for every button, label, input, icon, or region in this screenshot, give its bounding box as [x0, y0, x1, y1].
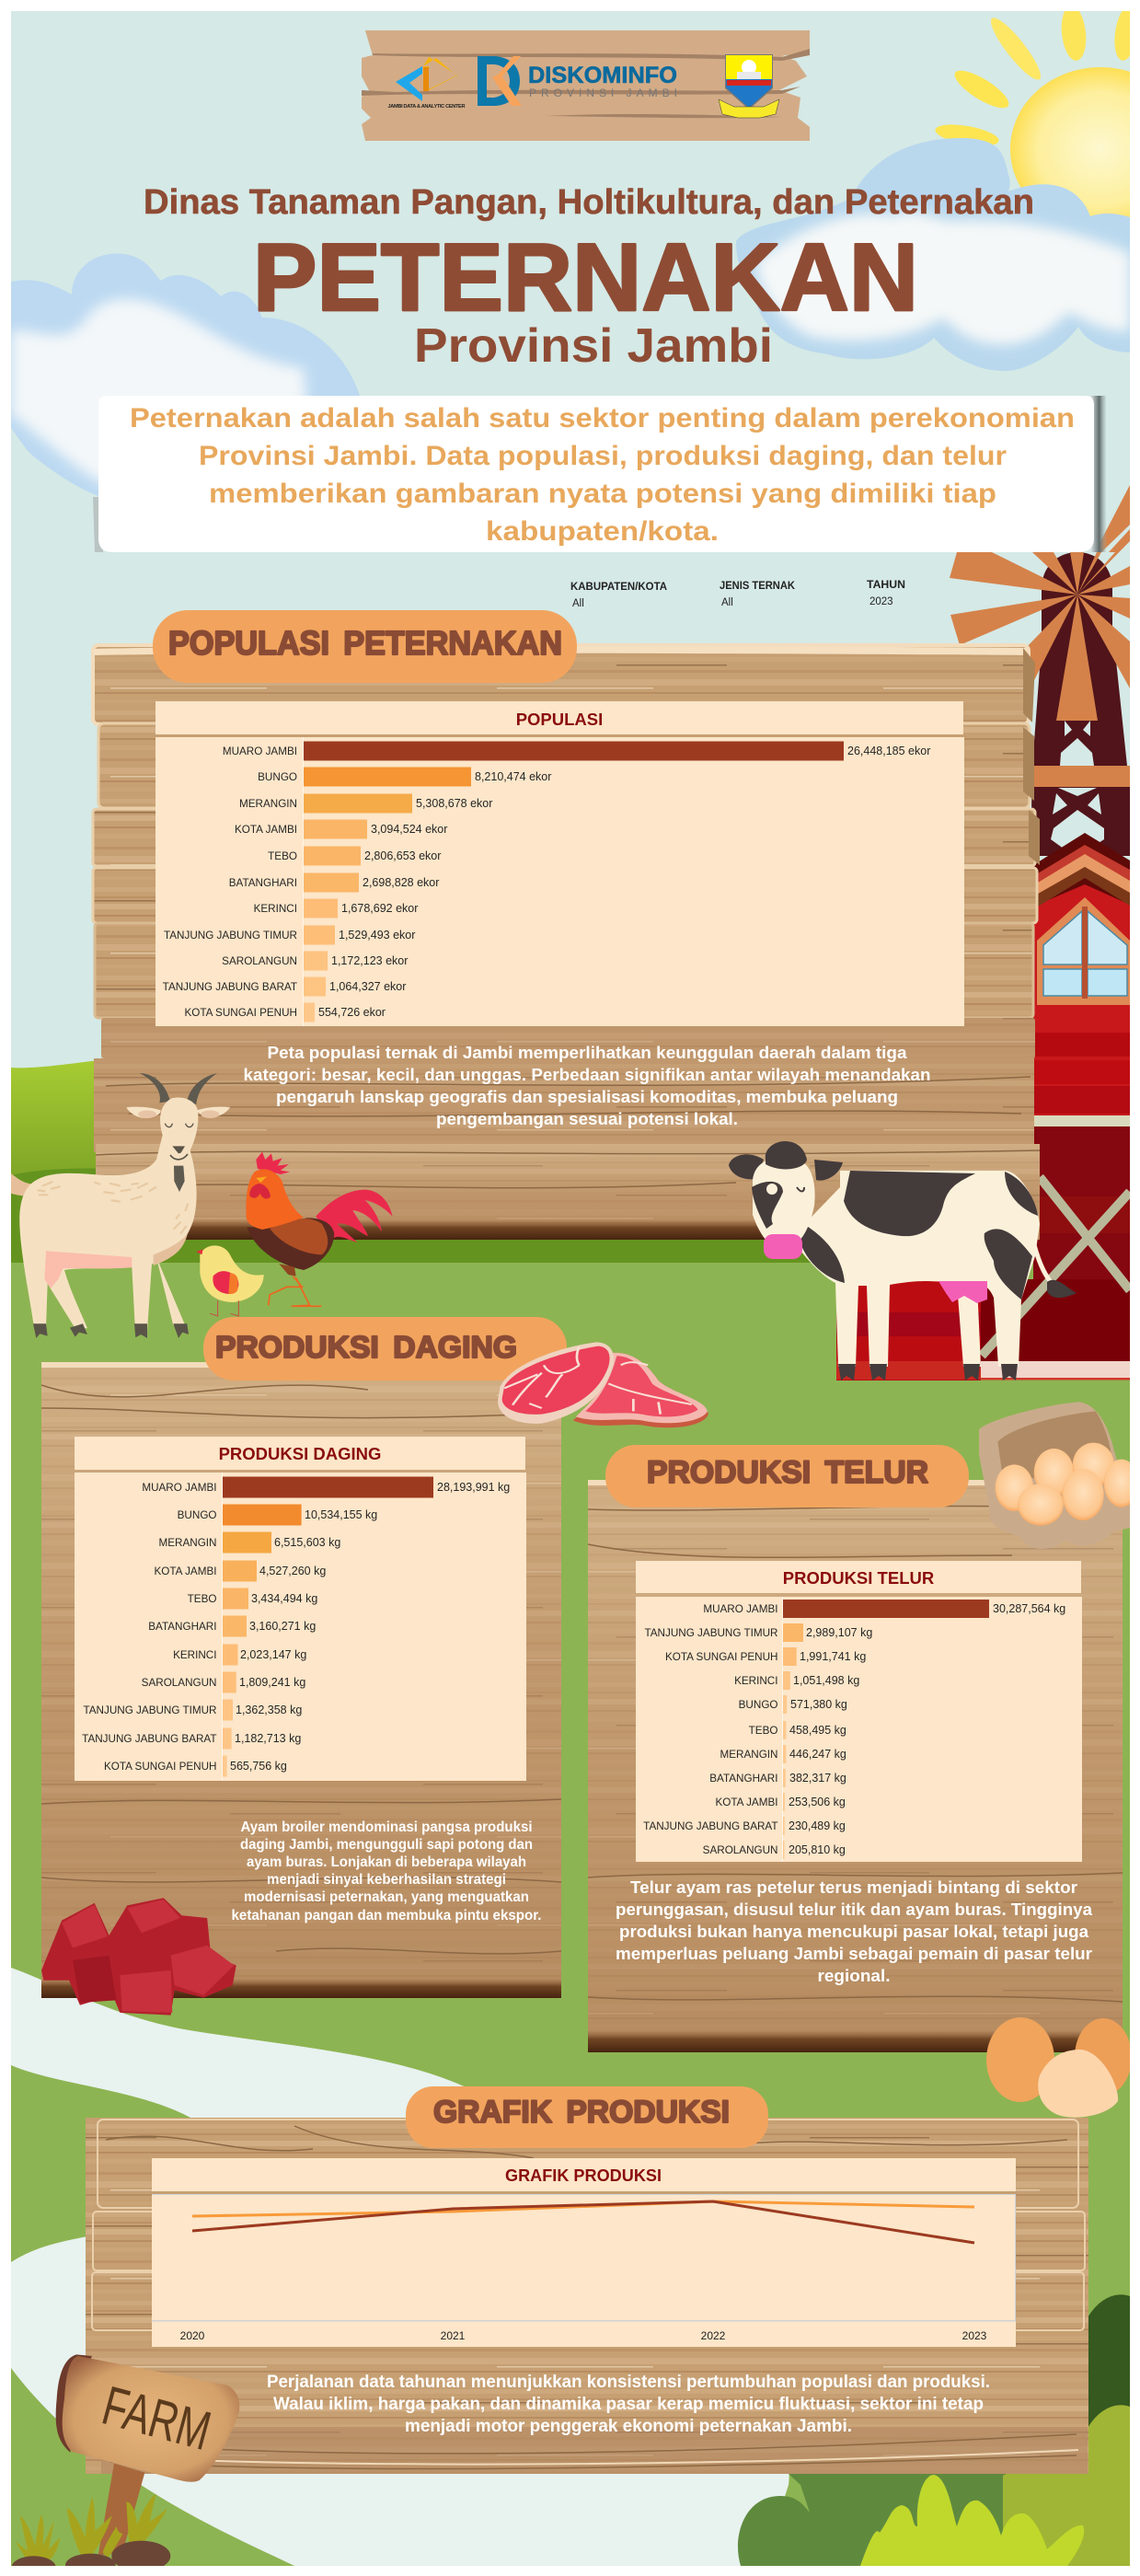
wooden sign board	[362, 30, 810, 141]
text block: populasi description: pengaruh lanskap geografis dan spesialisasi komoditas, membuka peluang	[276, 1087, 898, 1106]
text block: populasi description: Peta populasi ternak di Jambi memperlihatkan keunggulan daerah dalam tiga	[267, 1043, 907, 1062]
panel: populasi wood board	[93, 645, 1040, 1240]
green hills	[11, 1057, 1130, 2566]
chart: grafik produksi line chart	[152, 2158, 1016, 2347]
chart: produksi daging bar chart: 565,756 kg	[230, 1760, 287, 1773]
chart: produksi daging bar chart: 2,023,147 kg	[240, 1648, 306, 1661]
chart: produksi daging bar chart: BATANGHARI	[148, 1621, 217, 1633]
chart: produksi daging bar chart: SAROLANGUN	[142, 1677, 217, 1689]
windmill	[950, 485, 1130, 856]
filter: kabupaten/kota: All	[572, 598, 584, 609]
chart: produksi daging bar chart: 3,160,271 kg	[249, 1620, 316, 1633]
logo board	[362, 30, 810, 141]
chart: produksi daging bar chart: 1,182,713 kg	[235, 1732, 301, 1745]
chart: produksi daging bar chart: MUARO JAMBI	[142, 1482, 217, 1494]
chart: produksi telur bar chart: KOTA SUNGAI PENUH	[665, 1651, 778, 1663]
chart: produksi daging bar chart	[75, 1437, 526, 1781]
filter: jenis ternak: JENIS TERNAK	[720, 581, 796, 592]
text block: daging description: ketahanan pangan dan membuka pintu ekspor.	[232, 1908, 541, 1923]
logo: Jambi Data & Analytic Center	[388, 57, 466, 110]
pale road	[11, 1968, 789, 2566]
chart: produksi telur bar chart	[636, 1561, 1082, 1862]
windmill cross beam	[1031, 766, 1130, 787]
filter: tahun: TAHUN	[867, 580, 905, 591]
chart: populasi bar chart: POPULASI	[516, 710, 603, 729]
chart: produksi telur bar chart: 446,247 kg	[789, 1748, 846, 1761]
heading pill: grafik produksi	[406, 2086, 768, 2148]
barn door braces	[982, 1192, 1130, 1356]
chart: produksi telur bar chart: SAROLANGUN	[703, 1844, 778, 1856]
text block: daging description: menjadi sinyal keberhasilan strategi	[267, 1872, 506, 1888]
text block: daging description	[232, 1819, 541, 1923]
chart: populasi bar chart: KOTA SUNGAI PENUH	[184, 1007, 297, 1019]
chart: populasi bar chart: 26,448,185 ekor	[847, 745, 930, 757]
text block: daging description: ayam buras. Lonjakan di beberapa wilayah	[247, 1854, 526, 1870]
icon: cow	[729, 1141, 1077, 1380]
heading pill: populasi peternakan	[153, 610, 577, 683]
text block: grafik description: Walau iklim, harga pakan, dan dinamika pasar kerap memicu fluktuasi, sektor ini tetap	[273, 2394, 984, 2414]
icon: brown eggs	[986, 2017, 1132, 2118]
chart: produksi daging bar chart: 6,515,603 kg	[274, 1536, 340, 1549]
logo text: Diskominfo: DISKOMINFO	[528, 63, 677, 88]
chart: populasi bar chart: MUARO JAMBI	[223, 745, 297, 757]
text block: telur description: regional.	[817, 1966, 891, 1985]
chart: populasi bar chart: 3,094,524 ekor	[371, 823, 447, 836]
filter: jenis ternak	[720, 582, 795, 606]
chart: produksi daging bar chart: 3,434,494 kg	[251, 1592, 317, 1605]
chart: produksi telur bar chart: BATANGHARI	[709, 1773, 778, 1785]
heading pill: produksi telur	[605, 1445, 969, 1507]
text block: telur description: produksi bukan hanya mencukupi pasar lokal, tetapi juga	[619, 1922, 1089, 1941]
filter: tahun: 2023	[869, 596, 893, 607]
heading pill: produksi telur: PRODUKSI TELUR	[647, 1455, 928, 1490]
chart: populasi bar chart: TANJUNG JABUNG BARAT	[163, 981, 297, 993]
logo: Jambi crest	[719, 54, 779, 118]
chart: produksi telur bar chart: 2,989,107 kg	[806, 1626, 872, 1639]
white intro box	[93, 396, 1106, 552]
text block: daging description: daging Jambi, mengungguli sapi potong dan	[240, 1837, 533, 1853]
chart: produksi telur bar chart: KOTA JAMBI	[716, 1796, 778, 1808]
chart: populasi bar chart: 5,308,678 ekor	[416, 797, 492, 810]
heading pill: populasi peternakan: POPULASI PETERNAKAN	[168, 624, 562, 662]
barn window	[1037, 897, 1130, 1005]
text block: populasi description: pengembangan sesuai potensi lokal.	[436, 1109, 738, 1128]
intro line 1: Peternakan adalah salah satu sektor penting dalam perekonomian	[130, 403, 1075, 433]
dark green bush	[1088, 2294, 1130, 2426]
text block: telur description	[616, 1877, 1093, 1985]
text block: populasi description: kategori: besar, kecil, dan unggas. Perbedaan signifikan antar wilayah menandakan	[243, 1065, 931, 1084]
chart: produksi daging bar chart: BUNGO	[178, 1509, 217, 1521]
chart: grafik produksi line chart: GRAFIK PRODUKSI	[505, 2166, 662, 2185]
chart: produksi daging bar chart: TANJUNG JABUNG TIMUR	[83, 1704, 217, 1716]
chart: produksi daging bar chart: 4,527,260 kg	[259, 1565, 326, 1577]
intro line 4: kabupaten/kota.	[486, 516, 719, 547]
heading pill: grafik produksi: GRAFIK PRODUKSI	[433, 2095, 730, 2130]
icon: right cloud	[736, 138, 1130, 371]
chart: populasi bar chart	[155, 701, 964, 1026]
chart: produksi telur bar chart: TEBO	[749, 1725, 778, 1737]
chart: populasi bar chart: 1,678,692 ekor	[341, 902, 418, 915]
chart: populasi bar chart: 2,698,828 ekor	[363, 876, 439, 889]
chart: grafik produksi line chart: 2023	[962, 2329, 987, 2342]
text block: telur description: perunggasan, disusul telur itik dan ayam buras. Tingginya	[616, 1900, 1093, 1919]
line: brown series	[192, 2201, 974, 2243]
icon: farm sign	[12, 2354, 239, 2576]
chart: produksi telur bar chart: TANJUNG JABUNG BARAT	[643, 1820, 778, 1832]
icon: sun with rays	[935, 11, 1130, 217]
chart: produksi telur bar chart: 382,317 kg	[789, 1772, 846, 1785]
barn lower wall and door	[836, 1279, 981, 1380]
heading pill: produksi daging: PRODUKSI DAGING	[215, 1330, 517, 1364]
icon: rooster	[246, 1152, 393, 1306]
chart: populasi bar chart: 1,529,493 ekor	[339, 929, 415, 941]
text block: grafik description: menjadi motor penggerak ekonomi peternakan Jambi.	[405, 2416, 852, 2436]
chart: produksi telur bar chart: PRODUKSI TELUR	[783, 1568, 934, 1588]
barn	[836, 833, 1130, 1380]
chart: produksi daging bar chart: 10,534,155 kg	[305, 1508, 377, 1521]
chart: produksi telur bar chart: BUNGO	[739, 1699, 778, 1711]
panel: produksi daging wood board	[41, 1362, 561, 1998]
chart: produksi telur bar chart: MUARO JAMBI	[703, 1603, 778, 1615]
chart: populasi bar chart: BUNGO	[258, 771, 297, 783]
chart: populasi bar chart: KOTA JAMBI	[235, 824, 297, 836]
text block: populasi description	[243, 1043, 931, 1128]
chart: produksi telur bar chart: 1,051,498 kg	[793, 1674, 859, 1687]
olive bush	[1003, 2405, 1130, 2566]
chart: produksi telur bar chart: 253,506 kg	[789, 1796, 846, 1808]
chart: populasi bar chart: TANJUNG JABUNG TIMUR	[164, 930, 297, 941]
logo: DX mark	[478, 56, 522, 106]
department heading: Dinas Tanaman Pangan, Holtikultura, dan Peternakan	[144, 183, 1034, 222]
chart: grafik produksi line chart: 2022	[701, 2329, 726, 2342]
chart: populasi bar chart: BATANGHARI	[229, 877, 297, 889]
subtitle: Provinsi Jambi	[414, 319, 773, 373]
road and lower bushes	[11, 1968, 1130, 2566]
filter: kabupaten/kota: KABUPATEN/KOTA	[570, 582, 667, 593]
chart: produksi daging bar chart: KOTA JAMBI	[155, 1565, 217, 1577]
chart: produksi daging bar chart: 1,362,358 kg	[236, 1704, 302, 1716]
text block: daging description: Ayam broiler mendominasi pangsa produksi	[241, 1819, 532, 1835]
chart: produksi telur bar chart: MERANGIN	[720, 1749, 778, 1761]
chart: produksi telur bar chart: 571,380 kg	[790, 1698, 847, 1711]
windmill tower	[1031, 552, 1130, 856]
filter: kabupaten/kota	[570, 582, 667, 606]
windmill blades	[950, 485, 1130, 721]
heading pill: produksi daging	[203, 1317, 567, 1380]
text block: daging description: modernisasi peternakan, yang menguatkan	[244, 1889, 529, 1905]
chart: produksi daging bar chart: TANJUNG JABUNG BARAT	[82, 1733, 217, 1745]
chart: populasi bar chart: 554,726 ekor	[318, 1006, 386, 1019]
chart: grafik produksi line chart: 2021	[441, 2329, 466, 2342]
chart: produksi telur bar chart: TANJUNG JABUNG TIMUR	[644, 1627, 778, 1639]
icon: red meat cubes	[41, 1898, 236, 2016]
chart: produksi daging bar chart: MERANGIN	[158, 1537, 217, 1549]
chart: produksi daging bar chart: TEBO	[188, 1593, 217, 1605]
main title: PETERNAKAN	[253, 225, 918, 331]
chart: produksi telur bar chart: 230,489 kg	[789, 1819, 846, 1832]
icon: goat	[11, 1073, 230, 1338]
text block: grafik description	[267, 2372, 990, 2436]
panel: produksi telur wood board	[588, 1480, 1123, 2052]
panel: grafik produksi wood board	[86, 2118, 1088, 2474]
text block: telur description: Telur ayam ras petelur terus menjadi bintang di sektor	[630, 1877, 1077, 1897]
text block: telur description: memperluas peluang Jambi sebagai pemain di pasar telur	[616, 1944, 1092, 1963]
filter: jenis ternak: All	[721, 597, 733, 608]
text block: grafik description: Perjalanan data tahunan menunjukkan konsistensi pertumbuhan populasi dan produksi.	[267, 2372, 990, 2392]
chart: populasi bar chart: 8,210,474 ekor	[475, 770, 551, 783]
chart: produksi daging bar chart: KOTA SUNGAI PENUH	[104, 1761, 217, 1773]
chart: populasi bar chart: KERINCI	[254, 903, 297, 915]
chart: populasi bar chart: TEBO	[268, 850, 297, 862]
sky background	[11, 11, 1130, 1068]
chart: populasi bar chart: 1,172,123 ekor	[331, 954, 408, 967]
chart: populasi bar chart: SAROLANGUN	[222, 955, 297, 967]
chart: produksi telur bar chart: 1,991,741 kg	[800, 1650, 866, 1663]
chart: grafik produksi line chart: 2020	[180, 2329, 205, 2342]
chart: populasi bar chart: 1,064,327 ekor	[329, 980, 406, 993]
chart: produksi telur bar chart: 205,810 kg	[789, 1843, 846, 1856]
intro line 3: memberikan gambaran nyata potensi yang dimiliki tiap	[209, 479, 996, 509]
chart: produksi daging bar chart: KERINCI	[173, 1649, 217, 1661]
chart: populasi bar chart: 2,806,653 ekor	[364, 849, 441, 862]
icon: egg carton	[979, 1402, 1139, 1549]
chart: produksi telur bar chart: KERINCI	[734, 1675, 778, 1687]
intro line 2: Provinsi Jambi. Data populasi, produksi daging, dan telur	[199, 441, 1007, 471]
logo text: Provinsi Jambi: PROVINSI JAMBI	[529, 87, 677, 99]
filter: tahun	[867, 580, 905, 605]
icon: raw meat steaks	[498, 1342, 708, 1427]
icon: chick	[196, 1245, 264, 1316]
chart: produksi daging bar chart: 1,809,241 kg	[239, 1676, 305, 1689]
chart: produksi telur bar chart: 458,495 kg	[789, 1724, 846, 1737]
chart: produksi telur bar chart: 30,287,564 kg	[993, 1602, 1065, 1615]
chart: populasi bar chart: MERANGIN	[239, 798, 297, 810]
chart: produksi daging bar chart: 28,193,991 kg	[437, 1481, 510, 1494]
chart: produksi daging bar chart: PRODUKSI DAGING	[219, 1444, 381, 1463]
icon: left cloud	[11, 254, 360, 497]
lime bush	[860, 2475, 1084, 2566]
line: orange series	[192, 2201, 974, 2216]
logo: Jambi Data & Analytic Center: JAMBI DATA & ANALYTIC CENTER	[388, 104, 466, 110]
sign lettering: FARM	[97, 2374, 217, 2462]
